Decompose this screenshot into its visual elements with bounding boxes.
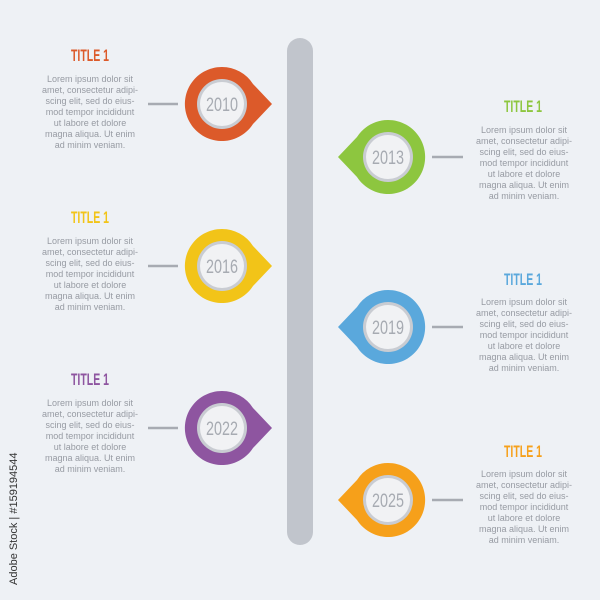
text 2022: amet, consectetur adipi- — [42, 409, 138, 419]
marker 2010 — [185, 67, 272, 141]
text 2016: ad minim veniam. — [55, 302, 125, 312]
marker 2016 — [185, 229, 272, 303]
marker 2025 — [338, 463, 425, 537]
text 2022: magna aliqua. Ut enim — [45, 453, 135, 463]
entry 2016 — [42, 208, 272, 312]
text 2019: Lorem ipsum dolor sit — [481, 297, 568, 307]
text 2025: ad minim veniam. — [489, 535, 559, 545]
text 2022 — [42, 398, 138, 474]
text 2013: amet, consectetur adipi- — [476, 136, 572, 146]
entry 2022 — [42, 370, 272, 474]
text 2016 — [42, 236, 138, 312]
text 2013: magna aliqua. Ut enim — [479, 180, 569, 190]
text 2025 — [476, 469, 572, 545]
marker 2019 — [338, 290, 425, 364]
marker 2013: 2013 — [372, 148, 404, 169]
text 2013: scing elit, sed do eius- — [479, 147, 569, 157]
text 2010: Lorem ipsum dolor sit — [47, 74, 134, 84]
text 2019 — [476, 297, 572, 373]
text 2025: mod tempor incididunt — [480, 502, 569, 512]
marker 2010: 2010 — [206, 95, 238, 116]
entry 2010 — [42, 46, 272, 150]
text 2022: Lorem ipsum dolor sit — [47, 398, 134, 408]
timeline bar — [287, 38, 313, 545]
watermark id: Adobe Stock | #159194544 — [8, 452, 20, 585]
marker 2022: 2022 — [206, 419, 238, 440]
text 2025: Lorem ipsum dolor sit — [481, 469, 568, 479]
text 2025: magna aliqua. Ut enim — [479, 524, 569, 534]
text 2019: ut labore et dolore — [488, 341, 560, 351]
text 2013: ut labore et dolore — [488, 169, 560, 179]
text 2016: scing elit, sed do eius- — [45, 258, 135, 268]
entry 2013 — [338, 97, 572, 201]
text 2013 — [476, 125, 572, 201]
text 2019: mod tempor incididunt — [480, 330, 569, 340]
marker 2025: 2025 — [372, 491, 404, 512]
marker 2019: 2019 — [372, 318, 404, 339]
text 2019: scing elit, sed do eius- — [479, 319, 569, 329]
text 2025: ut labore et dolore — [488, 513, 560, 523]
text 2019: amet, consectetur adipi- — [476, 308, 572, 318]
text 2010: amet, consectetur adipi- — [42, 85, 138, 95]
text 2010: ut labore et dolore — [54, 118, 126, 128]
title 2022: TITLE 1 — [71, 370, 109, 389]
marker 2013 — [338, 120, 425, 194]
text 2016: ut labore et dolore — [54, 280, 126, 290]
text 2013: Lorem ipsum dolor sit — [481, 125, 568, 135]
text 2010: scing elit, sed do eius- — [45, 96, 135, 106]
title 2025: TITLE 1 — [504, 442, 542, 461]
text 2010: ad minim veniam. — [55, 140, 125, 150]
text 2010: mod tempor incididunt — [46, 107, 135, 117]
title 2019: TITLE 1 — [504, 270, 542, 289]
entry 2025 — [338, 442, 572, 545]
text 2016: Lorem ipsum dolor sit — [47, 236, 134, 246]
text 2016: magna aliqua. Ut enim — [45, 291, 135, 301]
text 2022: ad minim veniam. — [55, 464, 125, 474]
text 2022: scing elit, sed do eius- — [45, 420, 135, 430]
marker 2022 — [185, 391, 272, 465]
text 2025: amet, consectetur adipi- — [476, 480, 572, 490]
marker 2016: 2016 — [206, 257, 238, 278]
title 2013: TITLE 1 — [504, 97, 542, 116]
text 2010: magna aliqua. Ut enim — [45, 129, 135, 139]
title 2016: TITLE 1 — [71, 208, 109, 227]
text 2013: mod tempor incididunt — [480, 158, 569, 168]
entry 2019 — [338, 270, 572, 373]
text 2019: magna aliqua. Ut enim — [479, 352, 569, 362]
text 2013: ad minim veniam. — [489, 191, 559, 201]
text 2025: scing elit, sed do eius- — [479, 491, 569, 501]
title 2010: TITLE 1 — [71, 46, 109, 65]
text 2022: mod tempor incididunt — [46, 431, 135, 441]
text 2022: ut labore et dolore — [54, 442, 126, 452]
text 2016: mod tempor incididunt — [46, 269, 135, 279]
text 2019: ad minim veniam. — [489, 363, 559, 373]
text 2016: amet, consectetur adipi- — [42, 247, 138, 257]
text 2010 — [42, 74, 138, 150]
